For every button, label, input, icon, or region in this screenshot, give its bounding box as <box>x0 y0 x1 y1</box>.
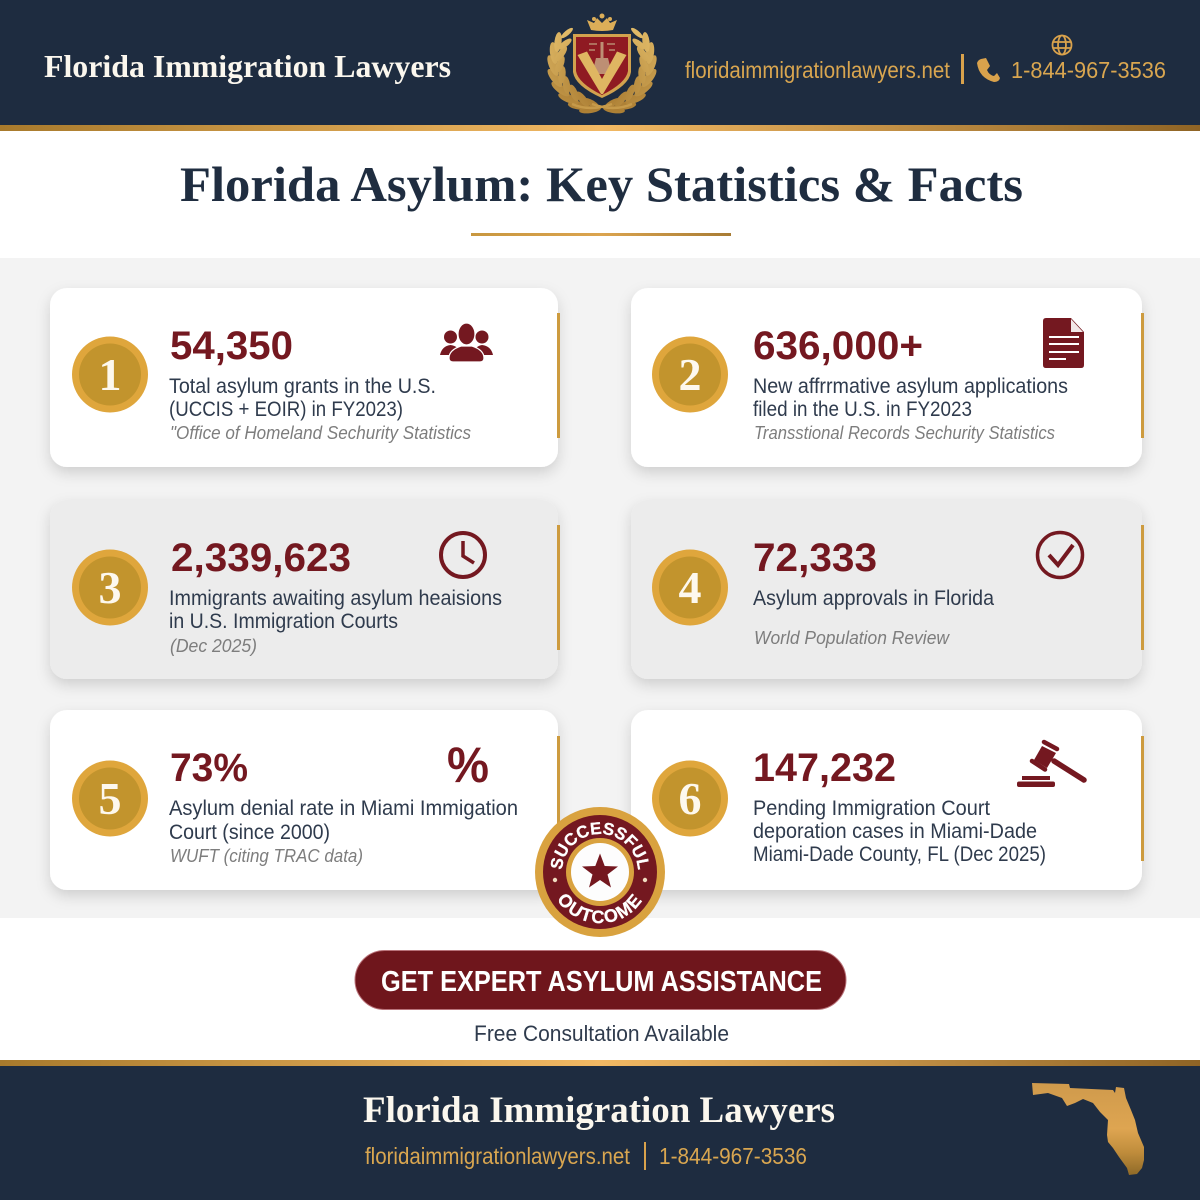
panel: stat 1 <box>50 288 560 467</box>
seal: successful outcome: SUCCESSFUL <box>550 822 649 870</box>
description: filed in the U.S. in FY2023 <box>753 398 972 421</box>
panel: stat 4 <box>631 500 1144 679</box>
panel: stat 6 <box>631 710 1144 890</box>
header band <box>0 0 1200 131</box>
Florida map <box>1032 1083 1144 1175</box>
header phone number: 1-844-967-3536 <box>1011 57 1166 83</box>
description: Asylum approvals in Florida <box>753 587 994 610</box>
icon: document <box>1043 318 1084 368</box>
description <box>753 375 1068 421</box>
statistic 73%: 73% <box>170 746 248 790</box>
description: Asylum denial rate in Miami Immigation <box>169 797 518 820</box>
description <box>169 375 436 421</box>
icon: phone <box>977 58 1000 82</box>
number badge 6 <box>652 760 728 836</box>
description: Pending Immigration Court <box>753 797 990 820</box>
icon: percent: % <box>447 737 489 793</box>
description: deporation cases in Miami-Dade <box>753 820 1037 843</box>
number badge 4 <box>652 550 728 626</box>
source: (Dec 2025) <box>170 636 257 656</box>
icon: check circle <box>1038 532 1082 578</box>
footer firm name: Florida Immigration Lawyers <box>363 1090 835 1131</box>
panel: stat 3 <box>50 500 560 679</box>
statistic 54,350: 54,350 <box>170 324 293 368</box>
source: Transstional Records Sechurity Statistics <box>754 423 1055 443</box>
number badge 1: 1 <box>98 349 122 400</box>
description: Miami-Dade County, FL (Dec 2025) <box>753 843 1046 866</box>
seal: successful outcome <box>535 807 665 937</box>
statistic 72,333: 72,333 <box>753 536 877 580</box>
panel: stat 2 <box>631 288 1144 467</box>
header divider <box>961 54 964 84</box>
number badge 5 <box>72 760 148 836</box>
description <box>169 797 518 844</box>
description: New affrrmative asylum applications <box>753 375 1068 398</box>
free consultation text: Free Consultation Available <box>474 1021 729 1046</box>
description <box>753 797 1046 866</box>
source: "Office of Homeland Sechurity Statistics <box>170 423 471 443</box>
number badge 6: 6 <box>678 773 702 824</box>
panel: stat 5 <box>50 710 560 890</box>
number badge 2: 2 <box>678 349 702 400</box>
icon: clock <box>441 533 485 577</box>
header firm name: Florida Immigration Lawyers <box>44 48 451 84</box>
call to action button <box>355 950 846 1010</box>
call to action button: GET EXPERT ASYLUM ASSISTANCE <box>381 966 822 998</box>
number badge 5: 5 <box>98 773 122 824</box>
icon: people <box>440 323 493 362</box>
source: World Population Review <box>754 628 950 648</box>
footer phone number: 1-844-967-3536 <box>659 1143 807 1169</box>
number badge 4: 4 <box>678 562 702 613</box>
footer website: floridaimmigrationlawyers.net <box>365 1143 631 1169</box>
seal: successful outcome: OUTCOME <box>558 894 642 924</box>
icon: globe <box>1052 36 1072 54</box>
logo crest <box>545 14 659 115</box>
footer divider <box>644 1142 646 1170</box>
description <box>169 587 502 633</box>
footer band <box>0 1060 1200 1200</box>
description: Total asylum grants in the U.S. <box>169 375 436 398</box>
number badge 3 <box>72 550 148 626</box>
statistic 147,232: 147,232 <box>753 746 896 790</box>
statistic 2,339,623: 2,339,623 <box>171 536 351 580</box>
number badge 1 <box>72 336 148 412</box>
description: Immigrants awaiting asylum heaisions <box>169 587 502 610</box>
icon: gavel <box>1017 742 1084 787</box>
number badge 2 <box>652 336 728 412</box>
title underline <box>471 233 731 236</box>
description: in U.S. Immigration Courts <box>169 610 398 633</box>
description: Court (since 2000) <box>169 821 330 844</box>
source: WUFT (citing TRAC data) <box>170 846 363 866</box>
statistics section background <box>0 258 1200 918</box>
description: (UCCIS + EOIR) in FY2023) <box>169 398 403 421</box>
statistic 636,000+: 636,000+ <box>753 324 923 368</box>
number badge 3: 3 <box>98 562 122 613</box>
header website: floridaimmigrationlawyers.net <box>685 57 951 83</box>
title: Florida Asylum: Key Statistics & Facts <box>180 156 1023 212</box>
